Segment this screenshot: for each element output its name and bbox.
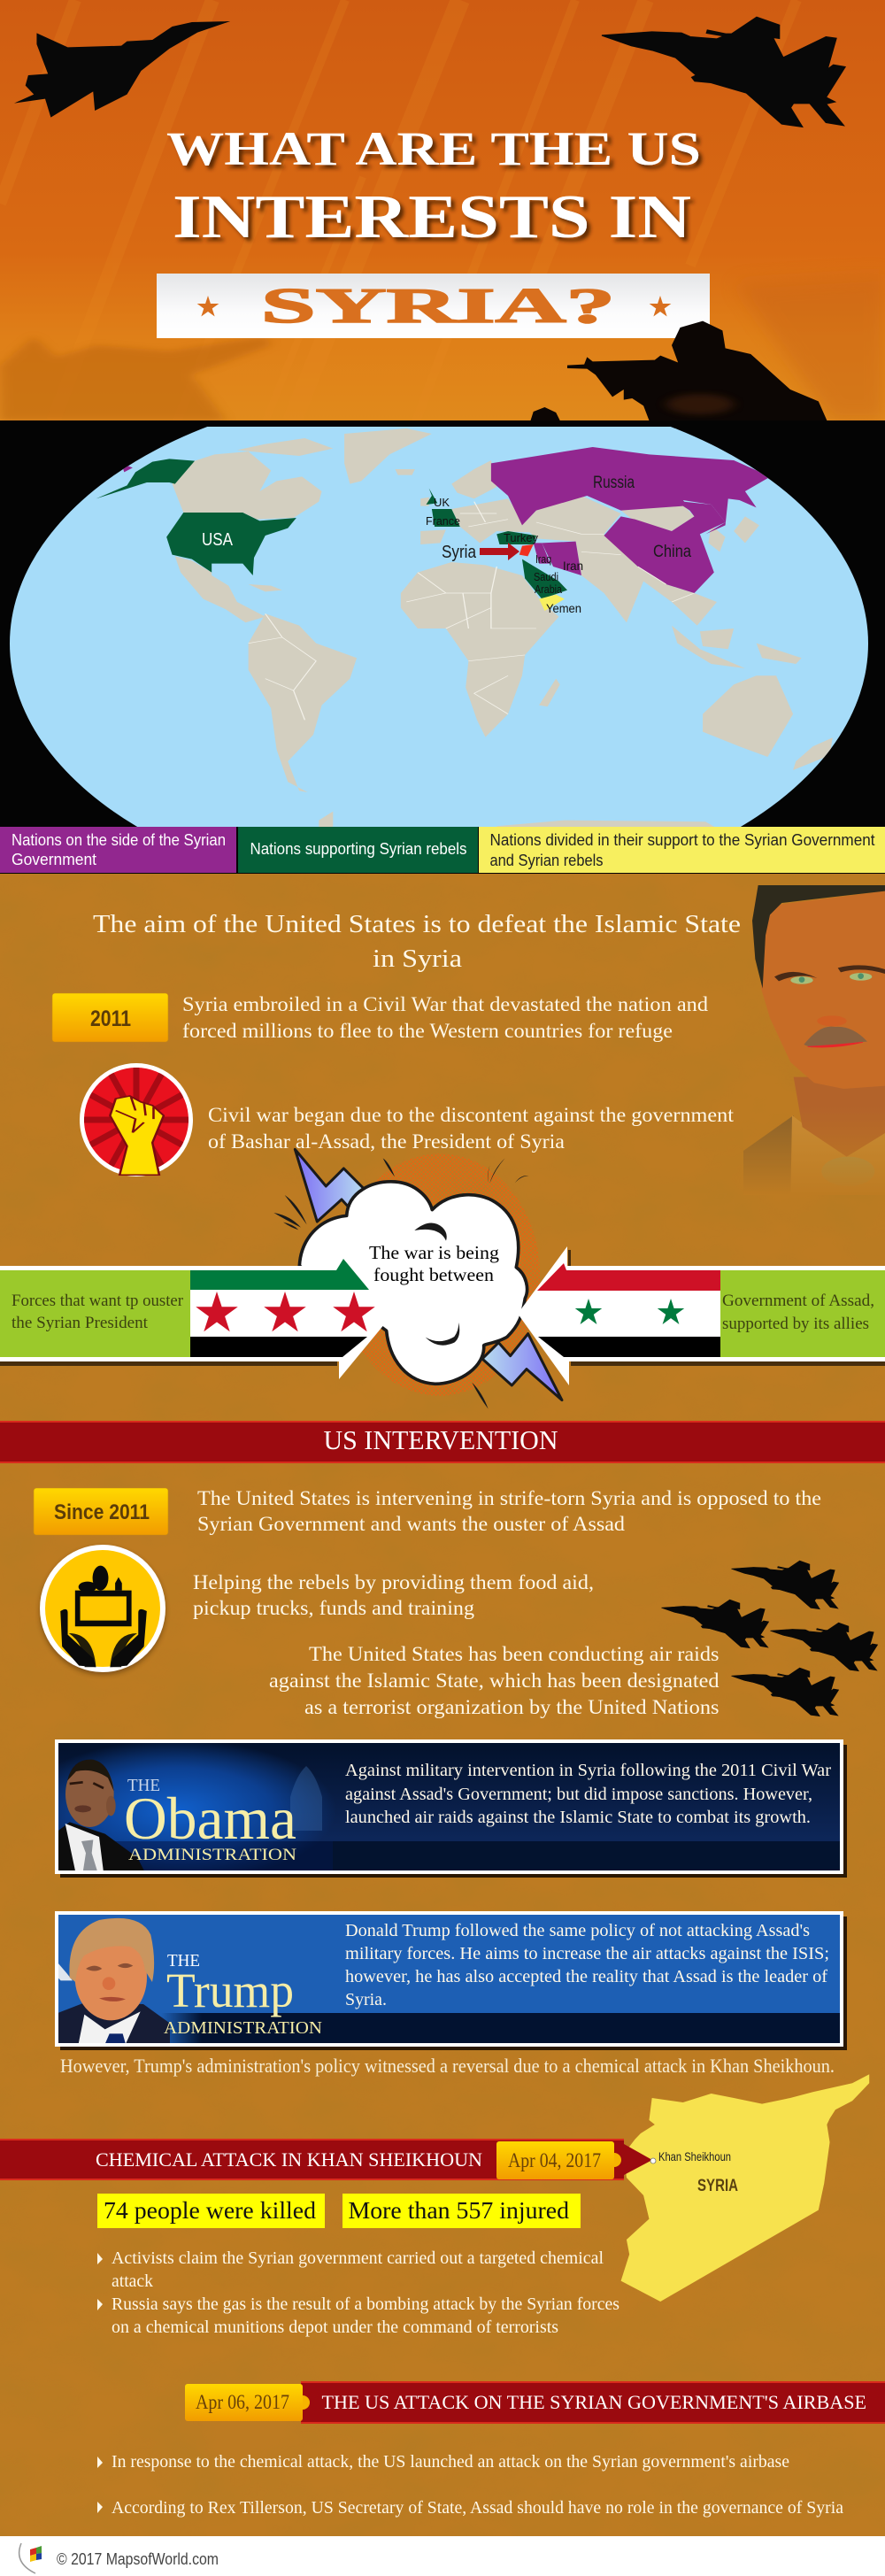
icon: four fighter jets — [661, 1561, 878, 1716]
panel text — [345, 1921, 829, 2009]
text: helping the rebels — [193, 1571, 594, 1619]
text: civil war 2011 — [182, 993, 709, 1042]
title: INTERESTS IN — [173, 183, 691, 251]
text: US intervening: The United States is intervening in strife-torn Syria and is opposed to the — [197, 1487, 821, 1509]
bullets: chemical attack: attack — [112, 2271, 153, 2291]
bullets: chemical attack: Activists claim the Syrian government carried out a targeted chemical — [112, 2248, 604, 2268]
map of Syria — [621, 2074, 869, 2302]
map panel background — [0, 420, 885, 874]
legend: rebel supporters — [238, 827, 478, 873]
section band: US attack: THE US ATTACK ON THE SYRIAN GOVERNMENT'S AIRBASE — [322, 2391, 866, 2413]
panel text: however, he has also accepted the reality that Assad is the leader of — [345, 1967, 827, 1986]
text: civil war 2011: Syria embroiled in a Civil War that devastated the nation and — [182, 993, 709, 1015]
heading: aim of the US: The aim of the United States is to defeat the Islamic State — [93, 910, 741, 938]
subtitle box: Syria: SYRIA? — [261, 279, 615, 334]
label: Syria: SYRIA — [697, 2177, 738, 2195]
green label: Assad government: supported by its allies — [722, 1315, 869, 1333]
bullets: US attack: According to Rex Tillerson, US Secretary of State, Assad should have no role in the governance of Syria — [112, 2498, 843, 2518]
stat box: injured: More than 557 injured — [349, 2197, 570, 2224]
beige land — [173, 428, 833, 838]
text: helping the rebels: pickup trucks, funds and training — [193, 1597, 475, 1619]
green label: Assad government: Government of Assad, — [722, 1292, 874, 1310]
legend: government side: Nations on the side of the Syrian — [12, 831, 226, 849]
label: Khan Sheikhoun: Khan Sheikhoun — [658, 2149, 731, 2163]
legend: rebel supporters: Nations supporting Syrian rebels — [250, 840, 467, 858]
text: air raids — [269, 1643, 720, 1718]
section band: chemical attack — [0, 2139, 652, 2180]
text: discontent — [208, 1104, 735, 1153]
map labels — [202, 474, 691, 615]
logo text: THE — [127, 1776, 160, 1795]
heading: aim of the US — [93, 910, 741, 973]
text: discontent: of Bashar al-Assad, the President of Syria — [208, 1130, 565, 1153]
map labels: Iraq — [535, 552, 551, 566]
text: policy reversal: However, Trump's administration's policy witnessed a reversal due to a chemical attack in Khan Sheikhoun. — [60, 2055, 835, 2077]
map labels: Syria — [442, 543, 477, 562]
capitol dome — [290, 1766, 322, 1831]
badge: Apr 04 — [496, 2141, 621, 2179]
green label: Assad government — [720, 1270, 885, 1357]
bullets: US attack: In response to the chemical attack, the US launched an attack on the Syrian government's airbase — [112, 2452, 789, 2472]
legend: government side — [0, 827, 236, 873]
background tank — [0, 336, 271, 420]
borders — [249, 502, 694, 720]
cloud body — [299, 1182, 527, 1384]
text: US intervening: Syrian Government and wants the ouster of Assad — [197, 1513, 626, 1535]
icon: right fighter jet — [602, 17, 845, 127]
icon: raised fist — [80, 1063, 193, 1176]
text: discontent: Civil war began due to the discontent against the government — [208, 1104, 735, 1126]
badge: Apr 06 — [185, 2384, 310, 2421]
cloud text: fought between — [373, 1264, 495, 1285]
Obama portrait — [58, 1760, 145, 1872]
panel: Obama administration — [18, 1739, 847, 1881]
section band: US intervention: US INTERVENTION — [324, 1424, 558, 1455]
comic cloud and lightning — [273, 1149, 562, 1409]
panel text — [345, 1761, 831, 1827]
text: helping the rebels: Helping the rebels by providing them food aid, — [193, 1571, 594, 1593]
legend: divided nations: and Syrian rebels — [490, 852, 604, 869]
logo text: ADMINISTRATION — [128, 1846, 296, 1864]
body background — [0, 874, 885, 2538]
icon: food aid in hands — [40, 1545, 165, 1675]
legend: divided nations: Nations divided in their support to the Syrian Government — [490, 831, 874, 849]
section band: US intervention — [0, 1421, 885, 1463]
logo text — [164, 1951, 322, 2038]
text: US intervening — [197, 1487, 821, 1535]
legend: government side: Government — [12, 851, 96, 868]
panel: Trump administration — [55, 1911, 847, 2050]
map labels: Yemen — [546, 601, 581, 615]
panel text: Against military intervention in Syria following the 2011 Civil War — [345, 1761, 831, 1780]
world map — [10, 427, 868, 827]
panel text: against Assad's Government; but did impose sanctions. However, — [345, 1785, 812, 1804]
section band: chemical attack: CHEMICAL ATTACK IN KHAN SHEIKHOUN — [96, 2148, 482, 2171]
label: USA: USA — [202, 530, 234, 550]
map labels: France — [426, 514, 460, 528]
stat box: injured — [342, 2194, 581, 2228]
logo text: Obama — [124, 1785, 296, 1852]
footer: © 2017 MapsofWorld.com — [57, 2550, 219, 2568]
arrow: government flag — [518, 1246, 885, 1385]
rebel-support green — [96, 459, 567, 599]
map labels: Russia — [593, 474, 635, 492]
icon: MapsofWorld logo — [19, 2543, 42, 2573]
panel text: military forces. He aims to increase the air attacks against the ISIS; — [345, 1944, 829, 1963]
icon: upper lightning bolt — [295, 1149, 365, 1222]
section band: US attack — [185, 2381, 885, 2424]
header panel — [0, 0, 885, 421]
text: civil war 2011: forced millions to flee to the Western countries for refuge — [182, 1020, 673, 1042]
logo text: Trump — [166, 1963, 294, 2017]
map labels: UK — [434, 496, 450, 509]
bullets: chemical attack — [97, 2248, 620, 2337]
badge: Apr 04: Apr 04, 2017 — [508, 2149, 601, 2171]
bullets: chemical attack: on a chemical munitions depot under the command of terrorists — [112, 2318, 558, 2337]
text: air raids: as a terrorist organization by the United Nations — [304, 1696, 720, 1718]
government-side purple — [121, 447, 771, 593]
map labels: China — [653, 543, 691, 561]
stat box: killed: 74 people were killed — [104, 2197, 317, 2224]
green label: forces against Assad: Forces that want tp ouster — [12, 1292, 184, 1310]
title — [166, 122, 701, 251]
logo text: THE — [167, 1951, 200, 1971]
legend — [0, 827, 885, 873]
heading: aim of the US: in Syria — [373, 945, 462, 973]
soldier silhouette — [531, 321, 827, 420]
text: air raids: The United States has been conducting air raids — [309, 1643, 720, 1665]
badge: 2011 — [52, 993, 168, 1042]
bullets: US attack — [97, 2452, 843, 2518]
Trump portrait — [58, 1918, 170, 2044]
stat box: killed — [97, 2194, 325, 2228]
cloud text — [369, 1242, 500, 1285]
cloud text: The war is being — [369, 1242, 500, 1263]
map labels: Turkey — [504, 531, 538, 544]
badge: since 2011 — [34, 1488, 168, 1535]
footer — [0, 2536, 885, 2576]
badge: since 2011: Since 2011 — [54, 1500, 150, 1524]
panel text: Donald Trump followed the same policy of not attacking Assad's — [345, 1921, 810, 1940]
arrow: points to Syria — [480, 543, 519, 560]
map labels: Iran — [563, 559, 583, 573]
panel text: Syria. — [345, 1990, 387, 2009]
green label: forces against Assad — [0, 1270, 190, 1357]
bullets: chemical attack: Russia says the gas is the result of a bombing attack by the Syrian forces — [112, 2294, 620, 2314]
green label: forces against Assad: the Syrian President — [12, 1314, 149, 1332]
badge: Apr 06: Apr 06, 2017 — [196, 2391, 289, 2413]
text: air raids: against the Islamic State, which has been designated — [269, 1670, 720, 1692]
panel text: launched air raids against the Islamic State to combat its growth. — [345, 1808, 811, 1827]
subtitle box: Syria — [157, 274, 710, 338]
portrait: Bashar al-Assad — [743, 885, 885, 1195]
map labels: Saudi — [534, 570, 558, 583]
logo text: ADMINISTRATION — [164, 2018, 322, 2038]
arrow: rebel flag — [0, 1253, 394, 1379]
icon: lower lightning bolt — [482, 1334, 562, 1400]
title: WHAT ARE THE US — [166, 122, 701, 175]
burst tick marks — [273, 1158, 529, 1409]
icon: left fighter jet — [14, 21, 230, 118]
badge: 2011: 2011 — [90, 1006, 131, 1031]
map labels: Arabia — [535, 582, 563, 596]
legend: divided nations — [479, 827, 885, 873]
